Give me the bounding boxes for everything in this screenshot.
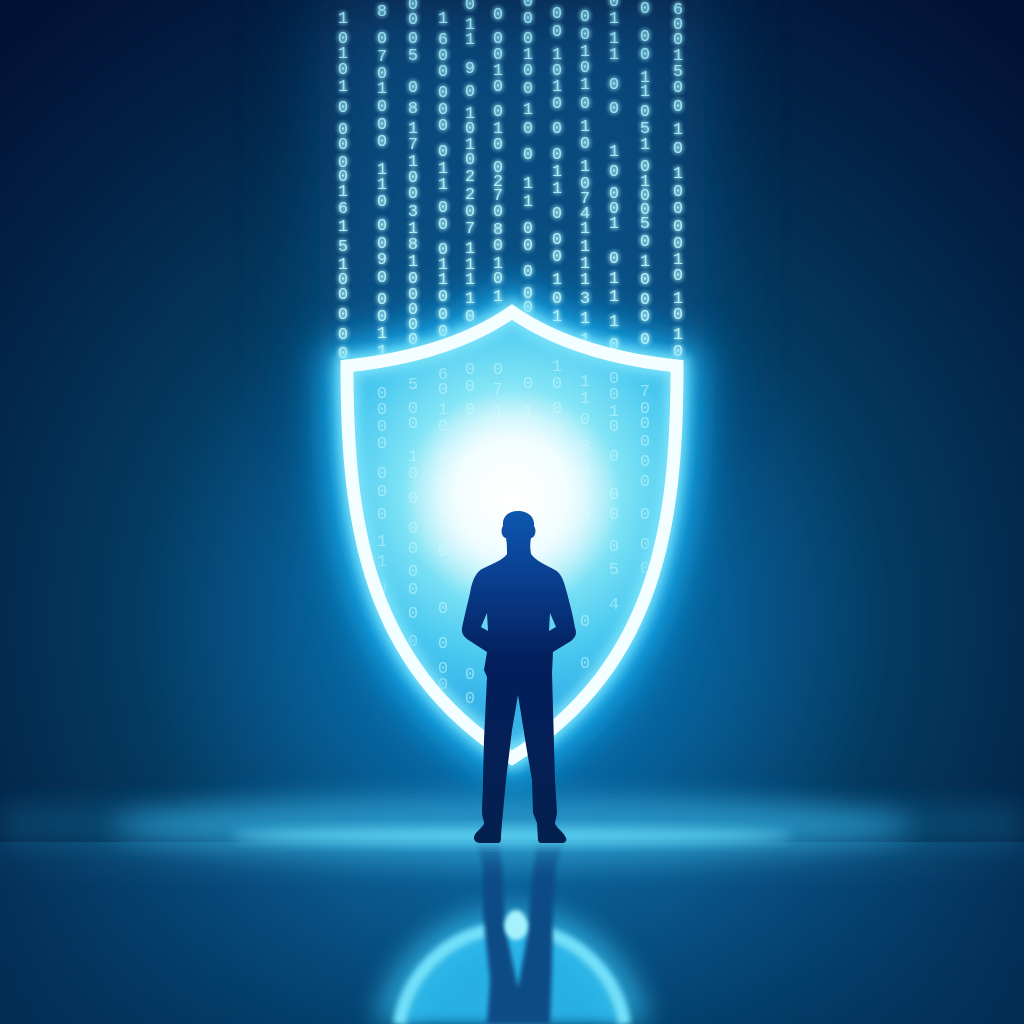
faded code inside shield: 601000000000	[438, 366, 448, 695]
shield interior	[354, 322, 670, 746]
faded code inside shield: 500100000000	[408, 376, 418, 652]
falling binary code columns: 00050817100318100000	[408, 0, 418, 350]
falling binary code columns	[338, 0, 683, 364]
faded code inside shield: 700000000	[640, 383, 650, 579]
falling binary code columns: 011901010220711110	[465, 0, 475, 327]
faded code inside shield: 11000000	[580, 373, 590, 674]
falling binary code columns: 60015001010000101010	[673, 1, 683, 362]
faded code inside shield: 0010000054	[609, 370, 619, 615]
shield reflection arc	[392, 924, 632, 1024]
floor with reflection	[0, 842, 1024, 1024]
faded code inside shield: 000000	[465, 361, 475, 709]
person silhouette	[462, 511, 576, 843]
falling binary code columns: 10101000001615100000	[338, 10, 348, 364]
horizon glow	[0, 798, 1024, 854]
faded code inside shield: 10000	[552, 358, 562, 459]
person reflection	[477, 843, 563, 1024]
falling binary code columns: 0001105101005010000	[640, 0, 650, 350]
reflection bright spot	[505, 910, 527, 940]
falling binary code columns: 8070100011000900011	[377, 3, 387, 362]
falling binary code columns: 0111001000101110	[609, 0, 619, 355]
faded code inside shield	[377, 358, 650, 709]
floor surface	[0, 842, 1024, 1024]
falling binary code columns: 0010101010741111311	[580, 8, 590, 350]
falling binary code columns: 160000001100011000	[438, 10, 448, 342]
faded code inside shield: 0710	[493, 361, 503, 444]
shield outline	[347, 312, 677, 758]
falling binary code columns: 0001001001100000	[523, 0, 533, 318]
interior light fill	[354, 322, 670, 746]
falling binary code columns: 0010100011000101	[552, 5, 562, 327]
light column behind the code	[320, 0, 704, 400]
falling binary code columns: 00010010027080101	[493, 6, 503, 307]
shield outer glow	[347, 312, 677, 758]
central white glow	[407, 396, 617, 596]
faded code inside shield: 0000000110	[377, 385, 387, 599]
faded code inside shield: 010	[523, 375, 533, 445]
